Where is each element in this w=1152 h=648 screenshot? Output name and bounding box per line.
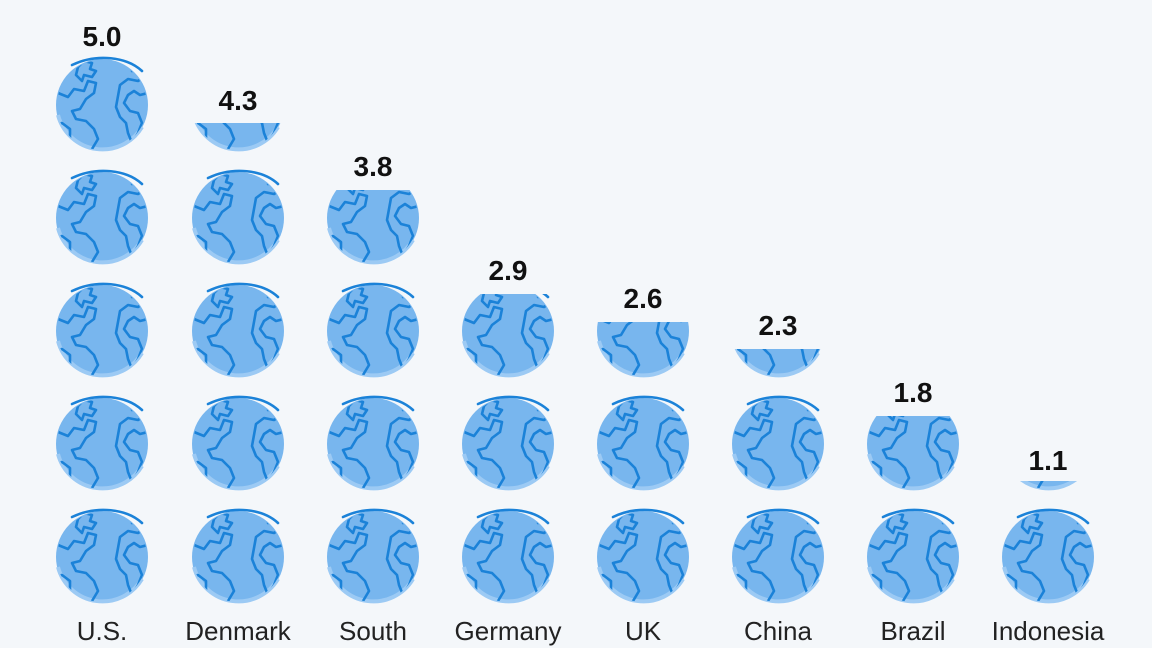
value label: Brazil: 1.8 xyxy=(894,377,932,408)
column: Denmark xyxy=(185,58,292,646)
value label: Indonesia: 1.1 xyxy=(1029,445,1067,476)
value label: UK: 2.6 xyxy=(624,283,662,314)
value label: U.S.: 5.0 xyxy=(83,21,121,52)
value label: China: 2.3 xyxy=(759,310,797,341)
column: U.S. xyxy=(52,21,150,646)
country label: UK: UK xyxy=(625,616,662,646)
country label: U.S.: U.S. xyxy=(77,616,127,646)
column: China xyxy=(732,316,824,640)
value label: Denmark: 4.3 xyxy=(219,85,257,116)
column: UK xyxy=(593,283,691,646)
value label: Germany: 2.9 xyxy=(489,255,527,286)
country label: Germany: Germany xyxy=(455,616,561,646)
column: Brazil xyxy=(863,377,961,646)
country label: Denmark: Denmark xyxy=(185,616,292,646)
value label: South: 3.8 xyxy=(354,151,392,182)
country label: China: China xyxy=(744,616,813,646)
column: Germany xyxy=(455,255,561,646)
column: South xyxy=(323,151,421,646)
country label: Brazil: Brazil xyxy=(880,616,946,646)
country label: Indonesia: Indonesia xyxy=(992,616,1105,646)
country label: South: South xyxy=(339,616,407,646)
column: Indonesia xyxy=(994,451,1104,640)
